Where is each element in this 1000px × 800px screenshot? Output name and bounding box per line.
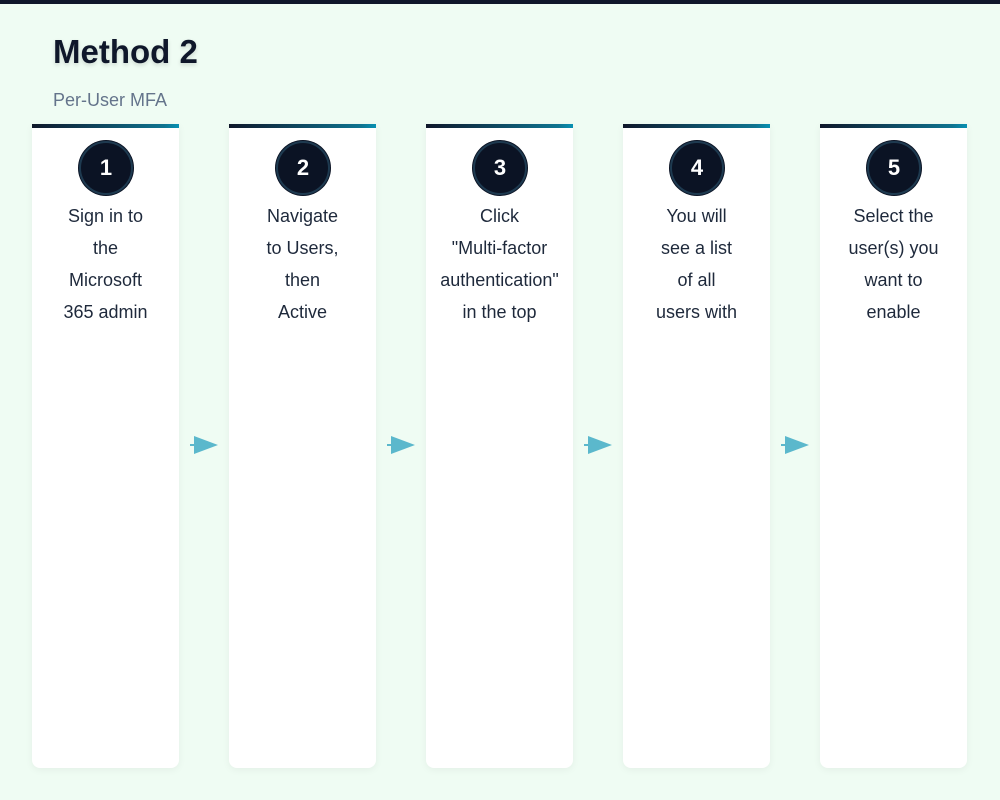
text: step 3: authentication"	[440, 270, 559, 290]
text: step 2: to Users,	[266, 238, 339, 258]
panel: step 3	[426, 124, 573, 768]
text: step 4	[656, 206, 737, 322]
icon: number 4	[670, 141, 724, 195]
subtitle: Per-User MFA	[53, 90, 167, 110]
icon: number 2: 2	[297, 155, 309, 180]
icon: number 2	[276, 141, 330, 195]
text: step 2	[266, 206, 339, 322]
panel: step 2	[229, 124, 376, 768]
text: step 5: enable	[866, 302, 921, 322]
text: step 1: Microsoft	[69, 270, 142, 290]
text: step 2: Active	[278, 302, 327, 322]
arrow 1	[190, 436, 218, 454]
text: step 1	[63, 206, 148, 322]
text: step 1: 365 admin	[63, 302, 148, 322]
panel: step 4	[623, 124, 770, 768]
text: step 5: want to	[864, 270, 923, 290]
panel: step 1	[32, 124, 179, 768]
text: step 4: see a list	[661, 238, 732, 258]
text: step 1: the	[93, 238, 118, 258]
text: step 4: You will	[666, 206, 727, 226]
icon: number 5	[867, 141, 921, 195]
text: step 5: user(s) you	[848, 238, 939, 258]
panel: step 5	[820, 124, 967, 768]
text: step 5: Select the	[853, 206, 934, 226]
text: step 1: Sign in to	[68, 206, 143, 226]
icon: number 1: 1	[100, 155, 112, 180]
icon: number 1	[79, 141, 133, 195]
text: step 3: in the top	[462, 302, 537, 322]
arrow 2	[387, 436, 415, 454]
text: step 2: Navigate	[267, 206, 338, 226]
text: step 3: "Multi-factor	[452, 238, 547, 258]
icon: number 4: 4	[691, 155, 703, 180]
text: step 2: then	[285, 270, 320, 290]
text: step 3	[440, 206, 559, 322]
text: step 4: of all	[677, 270, 716, 290]
arrow 4	[781, 436, 809, 454]
arrow 3	[584, 436, 612, 454]
title: Method 2	[53, 33, 198, 70]
icon: number 3: 3	[494, 155, 506, 180]
icon: number 5: 5	[888, 155, 900, 180]
text: step 3: Click	[480, 206, 519, 226]
text: step 4: users with	[656, 302, 737, 322]
icon: number 3	[473, 141, 527, 195]
text: step 5	[848, 206, 939, 322]
